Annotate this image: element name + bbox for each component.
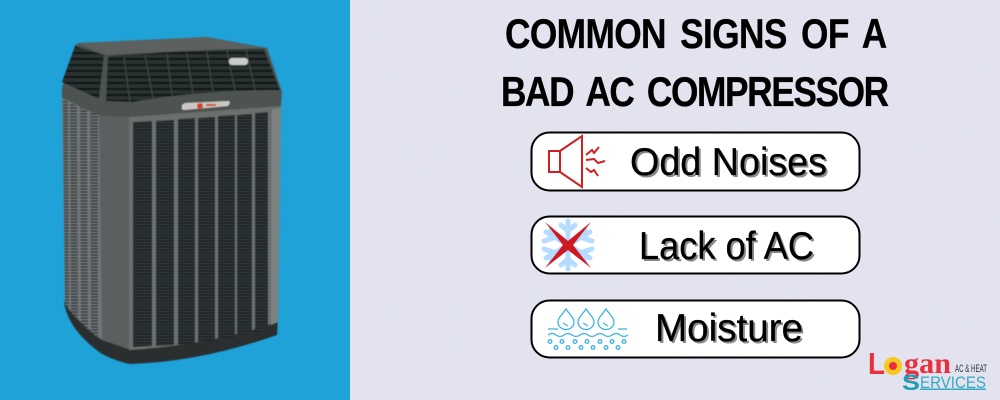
panel: odd noises (532, 132, 860, 190)
logo: Logan AC & Heat Services: gan (904, 347, 951, 380)
illustration: AC condenser unit (62, 37, 282, 364)
background: marble panel (350, 0, 1000, 400)
unit front panel (129, 100, 281, 350)
logo: Logan AC & Heat Services: L (868, 346, 885, 381)
unit side vent (62, 46, 104, 99)
blue panel (0, 0, 350, 400)
icon: speaker with noise (549, 136, 605, 187)
panel: moisture (532, 300, 860, 358)
icon: water drops and waves (548, 309, 628, 349)
unit front grille (133, 112, 268, 347)
unit front vent (106, 49, 280, 102)
label: odd noises: Odd Noises (630, 141, 827, 184)
label: odd noises: Odd Noises (632, 143, 829, 186)
label: moisture: Moisture (655, 307, 803, 350)
unit base (64, 302, 278, 364)
unit vent ribs (124, 50, 255, 102)
unit side panel (62, 98, 102, 340)
unit top shroud (62, 37, 282, 117)
unit lid (77, 37, 263, 55)
label: lack of ac: Lack of AC (639, 225, 814, 268)
title: COMMON SIGNS OF A (505, 11, 887, 58)
logo: Logan AC & Heat Services (868, 346, 987, 395)
unit side grille columns (63, 100, 98, 338)
badge: model plate (229, 58, 248, 65)
panel: lack of ac (532, 216, 860, 274)
logo: Logan AC & Heat Services: S (902, 370, 920, 395)
unit right edge strip (271, 108, 281, 325)
unit front corner post (99, 112, 131, 350)
label: lack of ac: Lack of AC (641, 227, 816, 270)
icon: crossed snowflake (544, 221, 592, 269)
title (501, 11, 889, 116)
logo: Logan AC & Heat Services: ERVICES (920, 374, 986, 392)
badge: brand plate (182, 101, 230, 110)
label: moisture: Moisture (657, 309, 805, 352)
title: BAD AC COMPRESSOR (501, 69, 889, 116)
